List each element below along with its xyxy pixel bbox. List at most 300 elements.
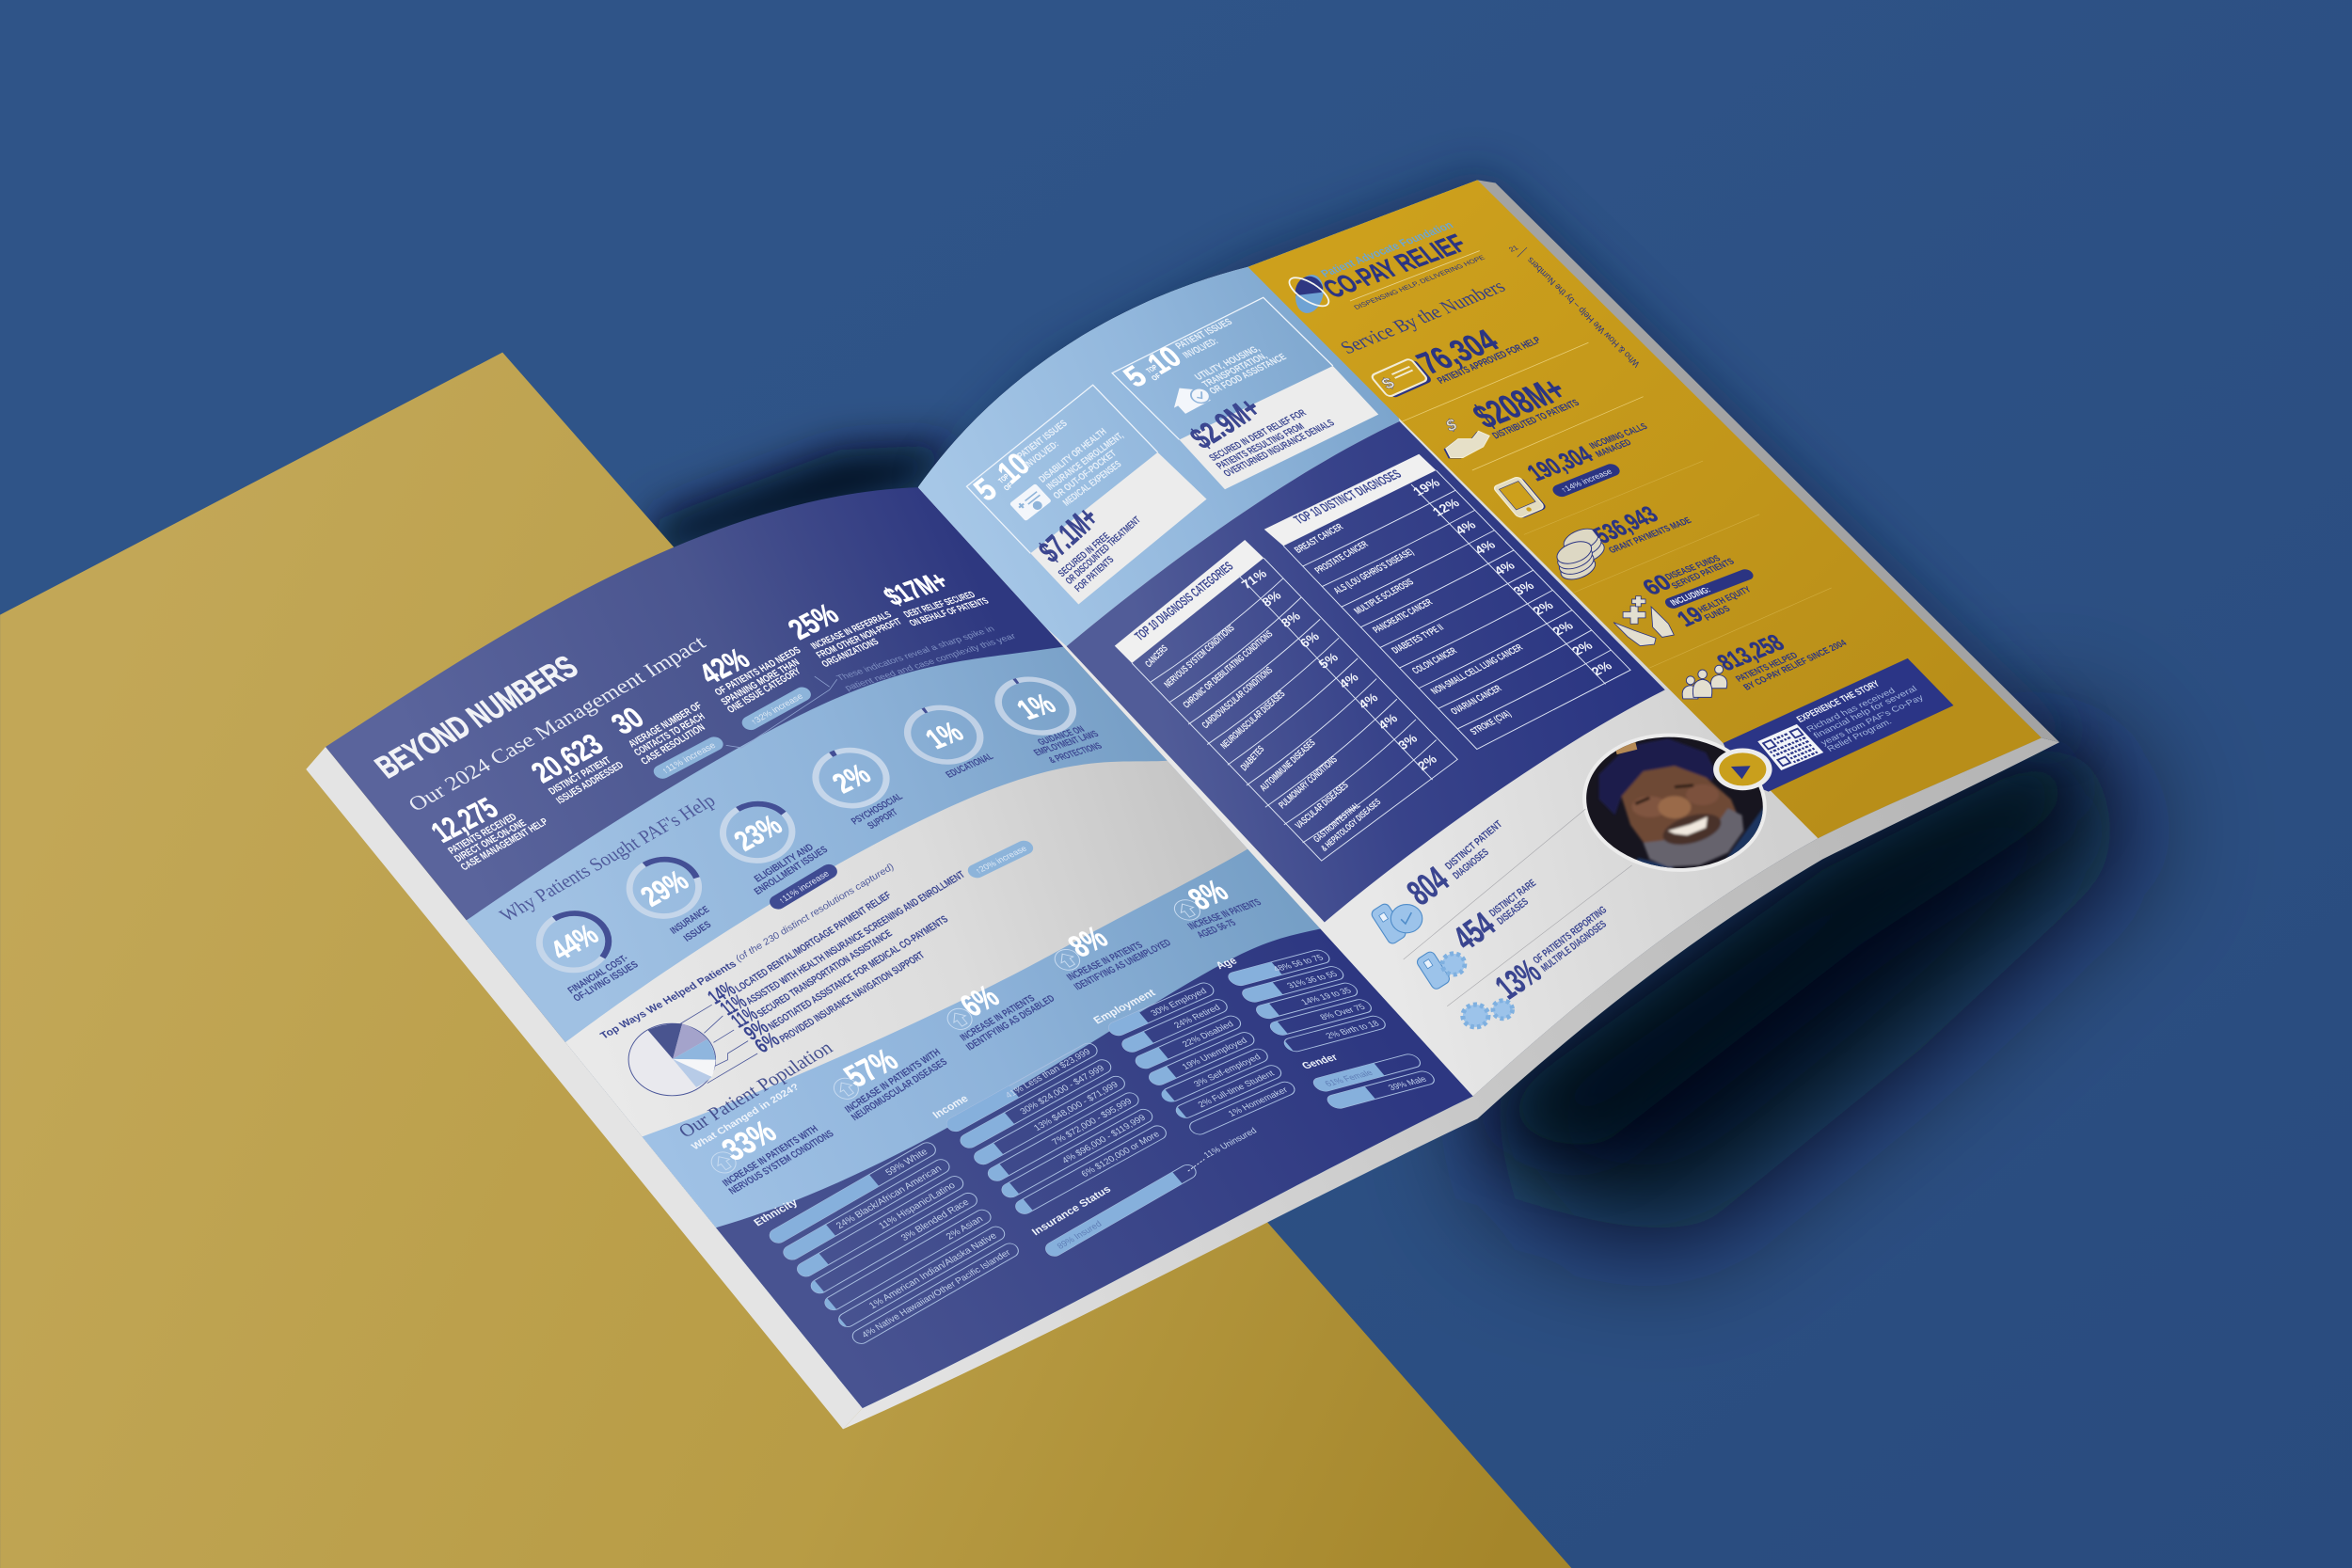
table: top 10 diagnosis categories: VASCULAR DISEASES [1294,780,1351,832]
bar chart: ethnicity: 2% Asian [945,1214,985,1242]
photo: Richard smiling [1582,734,1767,872]
list: top ways percentages: PROVIDED INSURANCE NAVIGATION SUPPORT [778,950,927,1045]
stat: 42% multiple needs [692,642,803,716]
table: top 10 diagnosis categories: 4% [1337,670,1361,691]
stat: 25% referrals: FROM OTHER NON-PROFIT [814,616,904,660]
bar chart: ethnicity: Ethnicity [752,1197,801,1228]
bar chart: age: 14% 19 to 35 [1298,985,1353,1006]
table: top 10 diagnosis categories: CHRONIC OR DEBILITATING CONDITIONS [1181,628,1275,710]
stat: 454 rare diseases: DISTINCT RARE [1487,878,1538,919]
donut: 29% insurance: ISSUES [681,919,713,944]
stat: 6% disabled [943,978,1057,1053]
table: top 10 diagnosis categories: 6% [1297,629,1322,650]
callout: indicators note with bracket: patient need and case complexity this year [843,632,1018,692]
bar chart: age: 8% Over 75 [1317,1002,1367,1022]
bar chart: ethnicity: 24% Black/African American [834,1164,944,1231]
table: top 10 distinct diagnoses: COLON CANCER [1410,645,1459,676]
stat: 76,304 approved: PATIENTS APPROVED FOR HELP [1436,335,1544,387]
stat: 813,258 patients helped [1682,629,1850,699]
face [1620,764,1737,845]
donut: 1% employment guidance: EMPLOYMENT LAWS [1032,729,1101,758]
panel: 5 of top 10 disability box: OF [1002,482,1014,493]
donut: 44% financial [526,902,641,1004]
stat: 25% referrals: 25% [782,598,846,646]
panel: 5 of top 10 utility box: TRANSPORTATION, [1200,351,1270,389]
panel: 5 of top 10 utility box: 10 [1140,341,1188,381]
bar chart: gender [1300,1053,1438,1110]
list: top ways percentages: 11% [715,990,752,1020]
icon: play button [1713,749,1772,790]
pill: 32% increase: ↑32% increase [749,691,804,726]
list: top ways percentages: SECURED TRANSPORTATION ASSISTANCE [755,928,895,1020]
stat: 42% multiple needs: 42% [692,642,756,690]
beanie [1599,738,1715,816]
page folio: 21 and side title: 21 [1507,244,1520,253]
stat: 30 contacts: 30 [605,702,651,741]
panel: 5 of top 10 utility box: OR FOOD ASSISTANCE [1207,352,1289,397]
panel: navy case management band [326,487,1473,1408]
list: top ways percentages: NEGOTIATED ASSISTANCE FOR MEDICAL CO-PAYMENTS [766,914,951,1032]
panel: light blue why patients band [467,647,1248,1227]
panel: 5 of top 10 utility box: PATIENT ISSUES [1173,317,1235,352]
bar chart: insurance status [1030,1126,1259,1259]
panel: experience the story: Richard has received [1804,686,1897,734]
stat: 13% multiple diagnoses: MULTIPLE DIAGNOSES [1539,919,1609,974]
panel: 5 of top 10 disability box: OR DISCOUNTED TREATMENT [1064,515,1143,587]
icon: hand with dollar [1444,415,1489,458]
bar chart: ethnicity: 59% White [883,1147,930,1178]
panel: right page light blue band [918,226,1400,646]
donut: 44% financial: FINANCIAL COST- [565,953,631,996]
beard [1644,808,1743,867]
heading: top ways we helped patients: (of the 230 distinct resolutions captured) [734,863,897,964]
stat: 190,304 calls: INCOMING CALLS [1587,422,1650,451]
bar chart: employment: 3% Self-employed [1191,1052,1263,1088]
pie chart: top ways [628,1005,757,1096]
donut: 23% eligibility: 23% [728,810,788,857]
list: top ways percentages: LOCATED RENTAL/MORTGAGE PAYMENT RELIEF [733,890,894,994]
left page [326,487,1473,1408]
icon: hand with dollar: $ [1444,415,1459,436]
pill: 11% increase navy: ↑11% increase [776,869,831,905]
donut: 44% financial: 44% [545,919,605,967]
panel: 5 of top 10 disability box: 5 [967,472,1004,508]
table: top 10 distinct diagnoses: 4% [1471,537,1499,557]
donut: 1% educational: 1% [919,717,970,755]
stat: 536,943 grants: GRANT PAYMENTS MADE [1607,516,1694,556]
panel: experience the story: financial help for several [1811,684,1919,740]
stat: 60 disease funds, 19 health equity: INCLUDING: [1668,585,1713,608]
bar chart: income [931,1040,1169,1216]
stat: 42% multiple needs: ONE ISSUE CATEGORY [725,666,803,716]
table: top 10 distinct diagnoses: 2% [1588,658,1615,678]
table: top 10 distinct diagnoses: STROKE (CVA) [1468,708,1514,737]
table: top 10 diagnosis categories: PULMONARY CONDITIONS [1277,754,1340,811]
donut: 23% eligibility [709,793,830,897]
table: top 10 diagnosis categories: CANCERS [1143,643,1170,670]
icon: capsule [1285,272,1333,316]
stat: 76,304 approved: 76,304 [1409,323,1506,381]
heading: our patient population: Our Patient Population [674,1037,837,1142]
stat: 20,623 issues: DISTINCT PATIENT [547,755,613,797]
bar chart: employment: 1% Homemaker [1226,1085,1290,1118]
panel: 5 of top 10 disability box [966,385,1207,605]
callout: indicators note with bracket [726,625,1018,748]
stat: 190,304 calls [1492,422,1650,519]
stat: 30 contacts [605,701,707,768]
panel: 5 of top 10 utility box: SECURED IN DEBT RELIEF FOR [1207,408,1309,464]
panel: light blue patient population band [642,848,1472,1408]
bar chart: income: 30% $24,000 - $47,999 [1018,1064,1106,1117]
bar chart: employment: 19% Unemployed [1180,1036,1249,1071]
stat: 6% disabled: IDENTIFYING AS DISABLED [964,993,1057,1053]
stat: $17M+ debt relief: $17M+ [878,567,955,611]
stat: 190,304 calls: MANAGED [1594,438,1634,459]
table: top 10 distinct diagnoses: 3% [1510,578,1537,598]
table: top 10 distinct diagnoses [1264,454,1630,750]
bar chart: employment: 24% Retired [1171,1002,1222,1030]
donut: 29% insurance: 29% [635,865,695,912]
list: top ways percentages: 9% [739,1016,773,1044]
stat: 8% aged 56-75: INCREASE IN PATIENTS [1185,897,1264,932]
panel: 5 of top 10 disability box: $7.1M+ [1032,500,1105,569]
donut: 1% employment guidance [984,671,1104,766]
stat: $208M+ distributed: DISTRIBUTED TO PATIENTS [1490,398,1581,441]
stat: 804 distinct diagnoses: DISTINCT PATIENT [1443,818,1504,872]
table: top 10 distinct diagnoses: TOP 10 DISTINCT DIAGNOSES [1291,467,1406,527]
table: top 10 diagnosis categories: 4% [1375,711,1400,733]
list: top ways percentages: 6% [750,1028,784,1057]
panel: 5 of top 10 utility box: OF [1150,372,1163,382]
stat: 6% disabled: 6% [953,978,1007,1023]
icon: phone [1492,476,1548,519]
stat: $208M+ distributed [1444,371,1581,458]
stat: 813,258 patients helped: PATIENTS HELPED [1734,651,1800,684]
stat: 42% multiple needs: OF PATIENTS HAD NEEDS [713,645,803,698]
table: top 10 distinct diagnoses: 4% [1490,558,1518,578]
bar chart: gender: 39% Male [1386,1074,1429,1092]
right page [918,180,2042,1097]
bar chart: income: 13% $48,000 - $71,999 [1032,1080,1120,1133]
icon: test tube with check [1370,902,1422,945]
stat: 33% nervous system [707,1114,836,1196]
table: top 10 distinct diagnoses: 2% [1529,597,1557,618]
panel: experience the story: EXPERIENCE THE STORY [1795,679,1882,725]
panel: experience the story: Relief Program. [1825,717,1894,753]
panel: 5 of top 10 disability box: SECURED IN FREE [1057,531,1112,579]
stat: 30 contacts: CASE RESOLUTION [639,722,707,768]
stat: 60 disease funds, 19 health equity: FUNDS [1703,604,1733,623]
panel: 5 of top 10 utility box [1112,297,1378,489]
pill: 11% increase navy [767,862,840,911]
stat: 8% unemployed: INCREASE IN PATIENTS [1065,940,1145,983]
table: top 10 distinct diagnoses: OVARIAN CANCER [1449,684,1504,717]
book page block edges [306,180,2059,1429]
bar chart: ethnicity: 4% Native Hawaiian/Other Pacific Islander [860,1247,1013,1340]
table: top 10 distinct diagnoses: NON-SMALL CELL LUNG CANCER [1429,642,1526,697]
stat: 25% referrals [782,598,904,670]
bar chart: income: 41% Less than $23,999 [1004,1047,1093,1101]
stat: 13% multiple diagnoses: 13% [1487,952,1548,1006]
stat: 6% disabled: INCREASE IN PATIENTS [958,993,1038,1043]
donut: 23% eligibility: ENROLLMENT ISSUES [752,845,830,897]
bar chart: insurance status: Insurance Status [1030,1184,1113,1238]
bar chart: employment: 2% Full-time Student [1196,1068,1277,1109]
pill: 32% increase [739,685,814,733]
table: top 10 diagnosis categories: AUTOIMMUNE DISEASES [1258,737,1318,794]
table: top 10 distinct diagnoses: 2% [1568,638,1596,657]
stat: 57% neuromuscular: INCREASE IN PATIENTS WITH [843,1047,943,1116]
bar chart: age: Age [1213,955,1240,972]
donut: 2% psychosocial: 2% [826,758,878,800]
stat: 190,304 calls: ↑14% increase [1559,467,1614,494]
heading: our patient population: What Changed in 2024? [690,1082,802,1152]
stat: 12,275 patients: PATIENTS RECEIVED [446,812,519,857]
table: top 10 diagnosis categories: & HEPATOLOGY DISEASES [1319,797,1383,854]
icon: check [1371,356,1433,400]
stat: 454 rare diseases: DISEASES [1495,896,1531,927]
list: top ways percentages: ASSISTED WITH HEALTH INSURANCE SCREENING AND ENROLLMENT [744,869,967,1007]
logo: co-pay relief: Patient Advocate Foundation [1318,219,1456,279]
stat: 12,275 patients: CASE MANAGEMENT HELP [458,816,551,873]
pill: 11% increase: ↑11% increase [660,741,718,776]
bar chart: insurance status: 11% Uninsured [1202,1126,1259,1160]
icon: insurance card [1009,483,1052,521]
stat: 190,304 calls: 190,304 [1521,441,1598,486]
bar chart: age: 31% 36 to 55 [1284,969,1340,990]
stat: 8% aged 56-75: AGED 56-75 [1195,918,1238,941]
list: top ways percentages [703,869,967,1057]
bar chart: ethnicity [752,1140,1022,1346]
stat: 8% unemployed [1050,920,1173,992]
donut: 2% psychosocial [803,740,905,832]
stat: 33% nervous system: 33% [714,1114,784,1167]
donut: 44% financial: OF-LIVING ISSUES [571,959,641,1004]
bar chart: employment: 22% Disabled [1180,1019,1235,1049]
heading: top ways we helped patients [598,863,897,1041]
stat: 8% unemployed: IDENTIFYING AS UNEMPLOYED [1072,938,1173,992]
stat: 30 contacts: CONTACTS TO REACH [632,711,707,758]
stat: $17M+ debt relief: DEBT RELIEF SECURED [901,590,978,620]
donut: 2% psychosocial: PSYCHOSOCIAL [850,791,905,827]
table: top 10 distinct diagnoses: DIABETES TYPE II [1390,623,1446,656]
donut: 1% educational: EDUCATIONAL [944,752,996,780]
panel: 5 of top 10 utility box: PATIENTS RESULTING FROM [1215,421,1307,471]
bar chart: ethnicity: 3% Blended Race [899,1197,972,1243]
panel: 5 of top 10 utility box: UTILITY, HOUSING, [1193,343,1263,383]
stat: 33% nervous system: NERVOUS SYSTEM CONDITIONS [727,1129,836,1196]
donut: 29% insurance: INSURANCE [668,904,711,937]
table: top 10 diagnosis categories: 4% [1356,690,1380,712]
panel: experience the story [1724,658,1953,792]
icon: house with check [1164,379,1214,416]
stat: 536,943 grants: 536,943 [1588,501,1663,548]
stat: 454 rare diseases [1415,878,1538,990]
table: top 10 diagnosis categories: 71% [1239,566,1269,592]
panel: 5 of top 10 utility box: 5 [1117,359,1154,394]
panel: 5 of top 10 disability box: FOR PATIENTS [1073,554,1116,594]
table: top 10 diagnosis categories: 8% [1259,588,1284,610]
stat: 804 distinct diagnoses: 804 [1400,860,1456,913]
stat: 804 distinct diagnoses [1370,818,1504,945]
bar chart: employment [1091,981,1298,1136]
donut: 23% eligibility: ELIGIBILITY AND [752,842,816,884]
stat: 57% neuromuscular: 57% [836,1042,905,1094]
background: gold diagonal panel [0,353,1571,1568]
panel: 5 of top 10 disability box: 10 [991,447,1037,491]
panel: 5 of top 10 disability box: INSURANCE ENROLLMENT, [1044,431,1126,493]
panel: gold service column [1248,165,2100,838]
panel: 5 of top 10 disability box: INVOLVED: [1023,439,1061,470]
table: top 10 distinct diagnoses: PROSTATE CANCER [1312,539,1371,576]
donut: 1% employment guidance: & PROTECTIONS [1046,741,1104,766]
panel: navy demographics band [716,929,1473,1408]
book shadow on blue surface [645,168,2145,1244]
table: top 10 diagnosis categories: GASTROINTESTINAL [1311,800,1362,845]
pill: 20% increase: ↑20% increase [973,844,1028,876]
donut: 1% employment guidance: GUIDANCE ON [1036,724,1088,748]
bar chart: gender: Gender [1300,1053,1341,1071]
table: top 10 distinct diagnoses: ALS (LOU GEHRIG'S DISEASE) [1331,546,1416,596]
pill: 20% increase [964,838,1037,880]
stat: 8% aged 56-75 [1169,873,1264,941]
panel: 5 of top 10 utility box: $2.9M+ [1184,391,1268,455]
callout: indicators note with bracket: These indicators reveal a sharp spike in [834,625,996,682]
panel: white top ways band [565,760,1471,1407]
stat: 8% aged 56-75: 8% [1181,873,1235,916]
stat: 57% neuromuscular: NEUROMUSCULAR DISEASES [850,1056,949,1123]
stat: 536,943 grants [1554,501,1694,584]
logo: co-pay relief [1285,219,1486,316]
panel: 5 of top 10 disability box: PATIENT ISSUES [1015,418,1070,462]
table: top 10 distinct diagnoses: 19% [1409,475,1443,499]
logo: co-pay relief: CO-PAY RELIEF [1317,230,1473,304]
table: top 10 distinct diagnoses: MULTIPLE SCLEROSIS [1352,577,1416,616]
table: top 10 distinct diagnoses: 2% [1549,618,1577,638]
stat: 12,275 patients [424,792,551,873]
bar chart: insurance status: 89% Insured [1056,1219,1104,1251]
panel: 5 of top 10 disability box: DISABILITY OR HEALTH [1037,426,1109,485]
bar chart: ethnicity: 1% American Indian/Alaska Native [867,1231,999,1311]
table: top 10 diagnosis categories: NEUROMUSCULAR DISEASES [1218,689,1287,752]
stat: 20,623 issues [524,727,626,806]
bar chart: employment: 30% Employed [1149,986,1208,1018]
stat: 12,275 patients: 12,275 [424,792,505,849]
panel: 5 of top 10 utility box: OVERTURNED INSURANCE DENIALS [1221,418,1337,479]
panel: 5 of top 10 utility box: INVOLVED: [1181,337,1221,360]
stat: 8% unemployed: 8% [1061,920,1115,964]
donut: 1% educational [894,698,996,780]
bar chart: income: Income [931,1093,971,1121]
logo: co-pay relief: DISPENSING HELP, DELIVERING HOPE [1352,253,1486,311]
list: top ways percentages: 11% [726,1003,762,1032]
icon: gears [1463,1001,1513,1027]
stat: 60 disease funds, 19 health equity: DISEASE FUNDS [1663,554,1724,582]
heading: top ways we helped patients: Top Ways We Helped Patients [598,958,739,1041]
stat: 25% referrals: ORGANIZATIONS [819,637,882,670]
stat: 42% multiple needs: SPANNING MORE THAN [719,657,802,707]
icon: people group [1682,665,1727,699]
stat: 13% multiple diagnoses: OF PATIENTS REPORTING [1531,904,1609,966]
panel: right page navy band [1067,421,1665,922]
heading: service by the numbers: Service By the Numbers [1336,276,1510,357]
stat: $208M+ distributed: $208M+ [1465,371,1574,436]
table: top 10 distinct diagnoses: PANCREATIC CANCER [1371,597,1435,636]
bar chart: income: 7% $72,000 - $95,999 [1050,1097,1135,1148]
table: top 10 diagnosis categories: 3% [1395,731,1420,752]
stat: 60 disease funds, 19 health equity [1613,554,1756,646]
table: top 10 diagnosis categories [1115,540,1457,861]
table: top 10 diagnosis categories: NERVOUS SYSTEM CONDITIONS [1162,623,1237,690]
icon: coins [1554,525,1607,584]
stat: 60 disease funds, 19 health equity: SERVED PATIENTS [1670,557,1737,591]
table: top 10 diagnosis categories: 2% [1415,752,1439,773]
icon: hands holding plus [1613,596,1674,646]
icon: QR code [1757,724,1823,770]
stat: $17M+ debt relief [878,567,992,628]
heading: why patients sought help: Why Patients Sought PAF's Help [495,789,720,926]
panel: 5 of top 10 utility box: TOP [1144,363,1160,374]
bar chart: age: 48% 56 to 75 [1271,952,1326,974]
table: top 10 distinct diagnoses: BREAST CANCER [1293,522,1346,556]
cheeks and nose [1632,797,1668,817]
stat: 804 distinct diagnoses: DIAGNOSES [1451,847,1491,881]
dividers in gold column [1402,342,1644,470]
heading: beyond numbers: BEYOND NUMBERS [368,649,585,784]
table: top 10 diagnosis categories: CARDIOVASCULAR CONDITIONS [1200,665,1275,731]
table: top 10 distinct diagnoses: 4% [1452,517,1479,537]
donut: 29% insurance [616,848,713,944]
stat: 60 disease funds, 19 health equity: HEALTH EQUITY [1696,585,1754,615]
panel: 5 of top 10 disability box: MEDICAL EXPENSES [1060,459,1123,508]
icon: check: $ [1377,374,1398,392]
stat: 25% referrals: INCREASE IN REFERRALS [809,610,894,652]
stat: $17M+ debt relief: ON BEHALF OF PATIENTS [907,596,992,628]
stat: 60 disease funds, 19 health equity: 60 [1638,570,1677,600]
stat: 60 disease funds, 19 health equity: 19 [1672,602,1708,631]
bar chart: age: 2% Birth to 18 [1324,1019,1381,1040]
bar chart: ethnicity: 11% Hispanic/Latino [877,1180,958,1231]
stat: 12,275 patients: DIRECT ONE-ON-ONE [453,818,529,864]
bar chart: gender: 61% Female [1322,1068,1375,1088]
panel: 5 of top 10 disability box: TOP [996,472,1011,485]
table: top 10 distinct diagnoses: 12% [1429,496,1463,518]
stat: 30 contacts: AVERAGE NUMBER OF [627,701,705,750]
table: top 10 diagnosis categories: 5% [1316,650,1341,672]
table: top 10 diagnosis categories: 8% [1279,609,1303,630]
stat: 813,258 patients helped: BY CO-PAY RELIEF SINCE 2004 [1741,639,1850,692]
bar chart: employment: Employment [1091,987,1158,1026]
donut: 2% psychosocial: SUPPORT [866,807,900,832]
stat: 20,623 issues: ISSUES ADDRESSED [554,760,626,806]
stat: 20,623 issues: 20,623 [524,727,610,789]
stat: 454 rare diseases: 454 [1445,905,1502,958]
heading: our 2024 case management impact: Our 2024 Case Management Impact [404,631,711,816]
panel: 5 of top 10 disability box: OR OUT-OF-POCKET [1051,448,1119,501]
stat: 13% multiple diagnoses [1463,904,1609,1027]
jacket [1725,807,1763,859]
bar chart: income: 4% $96,000 - $119,999 [1060,1113,1148,1166]
icon: test tube with gear [1415,950,1465,990]
stat: 33% nervous system: INCREASE IN PATIENTS WITH [721,1124,820,1189]
bar chart: income: 6% $120,000 or More [1079,1130,1162,1180]
smile [1668,816,1708,835]
donut: 1% employment guidance: 1% [1010,689,1062,725]
list: top ways percentages: 14% [703,977,740,1008]
stat: 76,304 approved [1371,323,1544,400]
pill: 11% increase [650,735,726,782]
page folio: 21 and side title: Who & How We Help – by the Numbers [1525,255,1642,369]
